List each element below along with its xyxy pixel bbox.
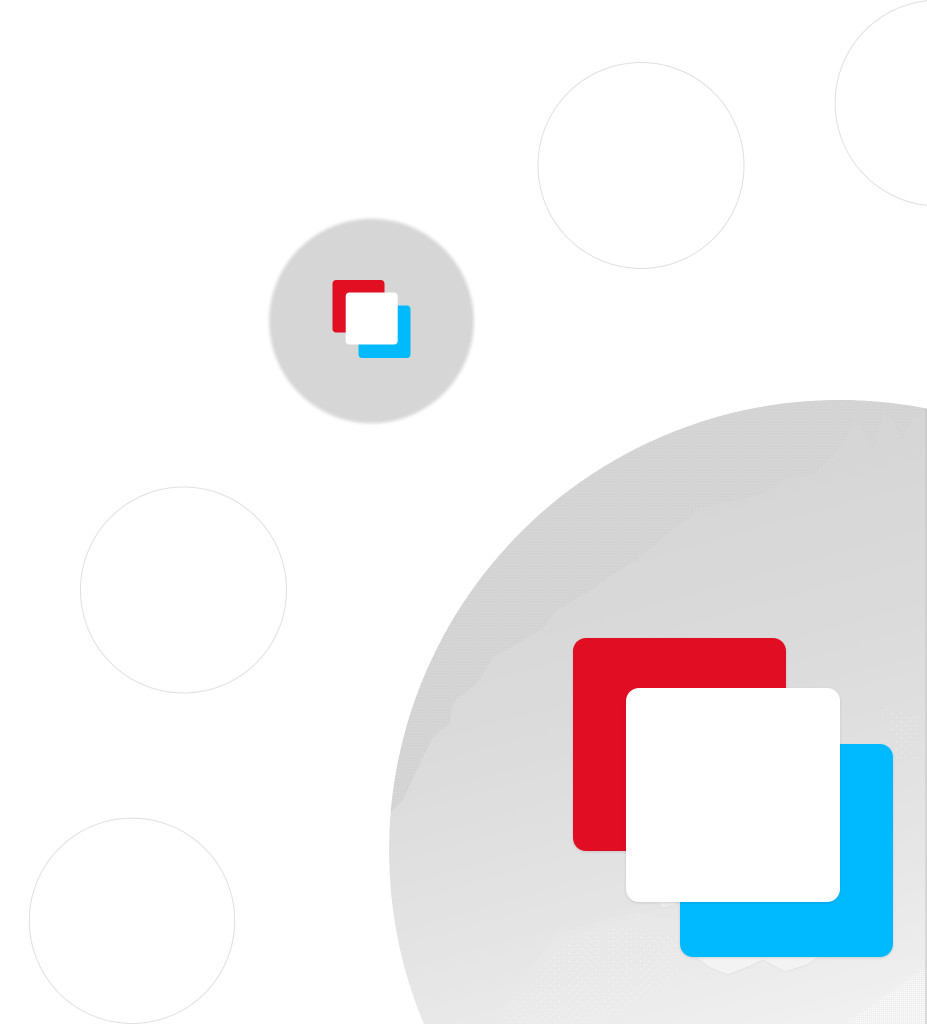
icon: small white square — [346, 292, 398, 344]
outline circle: top right — [835, 1, 927, 205]
small grey circle with logo — [269, 219, 474, 423]
dense white dots bottom right corner — [848, 970, 925, 1023]
torn shadow beneath white square — [633, 896, 680, 908]
small circle disc — [269, 219, 474, 423]
torn shadow beneath blue square — [693, 955, 822, 975]
sparse dots lower middle — [495, 925, 680, 1024]
large grey circle with logo — [380, 380, 927, 1024]
band stipple — [380, 380, 927, 813]
icon: small blue square — [358, 306, 410, 358]
outline circle: middle left — [80, 487, 286, 693]
lighter lower stratum — [490, 912, 927, 1024]
large white square — [626, 688, 840, 902]
icon: large red square — [573, 638, 786, 851]
outline circle: top centre — [538, 62, 744, 268]
sparse dots right of blue square — [884, 709, 915, 758]
band base tone — [380, 380, 927, 813]
outline circle: bottom left — [29, 818, 235, 1024]
divider strip at right edge — [925, 409, 927, 1024]
icon: small red square — [332, 280, 384, 332]
texture: stippled outer band — [380, 380, 927, 1024]
large blue square — [680, 744, 893, 957]
large circle disc — [389, 400, 927, 1024]
